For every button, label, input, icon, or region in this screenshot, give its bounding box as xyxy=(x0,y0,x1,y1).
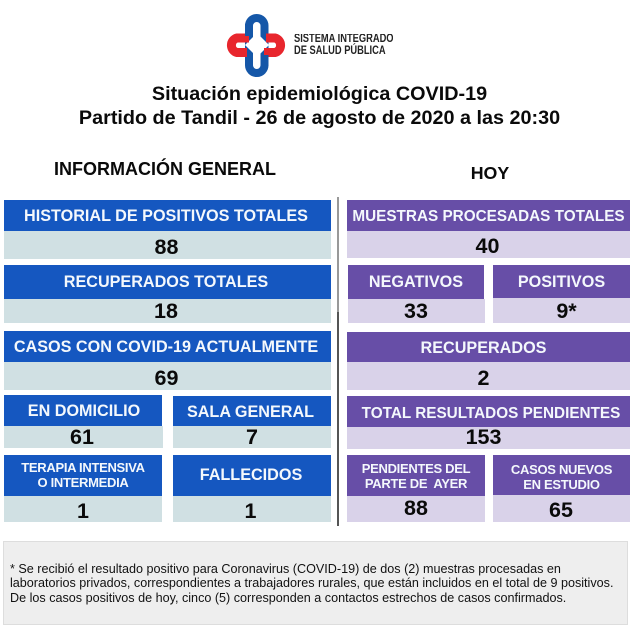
value xyxy=(173,426,331,448)
header: NEGATIVOS xyxy=(369,272,463,290)
header xyxy=(347,396,630,427)
panel: total resultados pendientes xyxy=(347,396,630,449)
header: HISTORIAL DE POSITIVOS TOTALES xyxy=(24,207,308,225)
value: 40 xyxy=(476,234,499,258)
panel: casos nuevos en estudio xyxy=(493,455,630,522)
icon: health system emblem xyxy=(226,14,286,77)
value: 88 xyxy=(404,496,428,520)
value: 69 xyxy=(155,366,178,390)
panel: fallecidos xyxy=(173,455,331,522)
value: 153 xyxy=(466,424,501,448)
header xyxy=(348,265,484,299)
logo text: DE SALUD PÚBLICA xyxy=(294,44,386,56)
divider xyxy=(337,197,339,526)
header: O INTERMEDIA xyxy=(37,474,128,490)
header: TERAPIA INTENSIVA xyxy=(21,460,145,474)
panel: terapia intensiva o intermedia xyxy=(4,455,162,522)
value xyxy=(347,496,485,522)
footnote text: laboratorios privados, correspondientes a trabajadores rurales, que están incluidos en el total de 9 positivos. xyxy=(10,576,613,590)
heading: información general: INFORMACIÓN GENERAL xyxy=(54,159,276,179)
panel: casos con covid-19 actualmente xyxy=(4,331,331,390)
panel: historial de positivos totales xyxy=(4,200,331,259)
value xyxy=(4,299,331,323)
value xyxy=(348,299,485,323)
value: 61 xyxy=(70,424,94,448)
title: Partido de Tandil - 26 de agosto de 2020 a las 20:30 xyxy=(79,106,560,128)
value: 65 xyxy=(549,498,573,522)
footnote xyxy=(3,541,628,625)
header: TOTAL RESULTADOS PENDIENTES xyxy=(362,404,620,422)
value xyxy=(4,496,162,522)
panel: muestras procesadas totales xyxy=(347,200,630,258)
footnote text: * Se recibió el resultado positivo para Coronavirus (COVID-19) de dos (2) muestras procesadas en xyxy=(10,562,561,576)
header xyxy=(4,200,331,231)
value xyxy=(493,495,630,522)
header xyxy=(4,395,162,426)
value: 1 xyxy=(245,498,256,522)
value xyxy=(347,362,630,390)
logo xyxy=(226,14,393,77)
footnote text: De los casos positivos de hoy, cinco (5) corresponden a contactos estrechos de casos confirmados. xyxy=(10,591,566,605)
panel: pendientes del parte de ayer xyxy=(347,455,485,522)
panel: sala general xyxy=(173,396,331,448)
header: RECUPERADOS TOTALES xyxy=(64,273,268,291)
value xyxy=(4,231,331,259)
header xyxy=(4,265,331,299)
panel: negativos xyxy=(348,265,485,323)
header: FALLECIDOS xyxy=(200,466,302,484)
header: EN DOMICILIO xyxy=(28,402,140,420)
logo text xyxy=(294,34,393,56)
header: SALA GENERAL xyxy=(187,402,314,420)
value: 33 xyxy=(404,298,428,322)
value xyxy=(173,496,331,522)
value xyxy=(4,426,163,448)
value: 9* xyxy=(556,298,577,322)
header: CASOS NUEVOS xyxy=(511,462,612,477)
value xyxy=(347,231,630,258)
header: POSITIVOS xyxy=(518,272,605,290)
header xyxy=(347,332,630,362)
value: 1 xyxy=(77,498,89,522)
header: EN ESTUDIO xyxy=(523,477,600,492)
footnote text xyxy=(10,562,613,605)
header: MUESTRAS PROCESADAS TOTALES xyxy=(352,208,625,225)
value: 7 xyxy=(246,424,258,448)
header: PENDIENTES DEL xyxy=(362,461,470,476)
header xyxy=(347,200,630,231)
panel: recuperados xyxy=(347,332,630,390)
header: CASOS CON COVID-19 ACTUALMENTE xyxy=(14,338,318,356)
header xyxy=(493,455,630,495)
panel: en domicilio xyxy=(4,395,163,448)
panel: recuperados totales xyxy=(4,265,331,323)
header: RECUPERADOS xyxy=(421,338,546,356)
value: 2 xyxy=(478,366,489,390)
header xyxy=(173,455,331,496)
heading: hoy: HOY xyxy=(471,163,509,183)
value xyxy=(4,362,331,390)
header xyxy=(4,455,162,496)
value: 88 xyxy=(155,234,178,258)
value: 18 xyxy=(154,298,178,322)
header xyxy=(4,331,331,362)
header xyxy=(493,265,630,298)
title xyxy=(79,83,560,128)
header xyxy=(347,455,485,496)
header xyxy=(173,396,331,426)
title: Situación epidemiológica COVID-19 xyxy=(152,83,487,105)
panel: positivos xyxy=(493,265,630,323)
value xyxy=(493,298,630,323)
value xyxy=(347,427,630,449)
header: PARTE DE AYER xyxy=(365,476,467,491)
